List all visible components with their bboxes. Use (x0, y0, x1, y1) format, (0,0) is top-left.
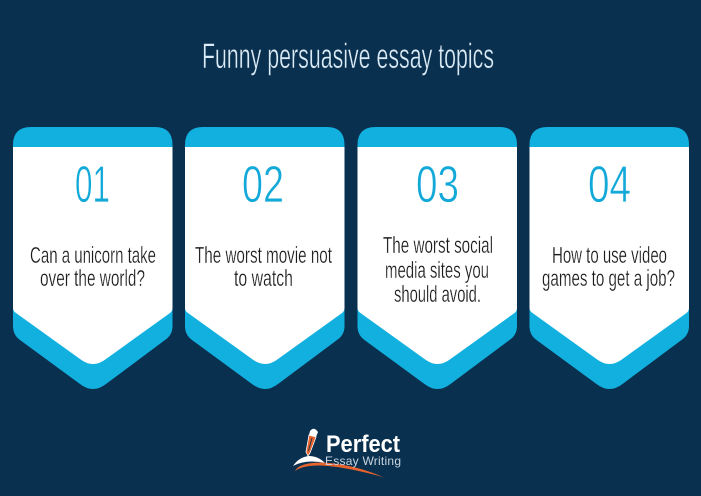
logo tagline: Essay Writing (325, 454, 401, 468)
icon: orange swoosh (295, 463, 383, 477)
text: card 03: media sites you (385, 257, 489, 283)
logo (293, 429, 401, 477)
text: card 04 (542, 242, 675, 291)
number 04: 04 (588, 156, 631, 214)
text: card 03 (383, 232, 493, 307)
text: card 02: to watch (234, 265, 293, 291)
text: card 01: over the world? (40, 265, 145, 291)
panel: card 04 (530, 127, 689, 389)
number 03: 03 (416, 156, 459, 214)
number 01: 01 (75, 156, 110, 214)
text: card 03: The worst social (383, 232, 493, 258)
text: card 03: should avoid. (394, 281, 481, 307)
text: card 02: The worst movie not (195, 242, 332, 268)
panel: card 02 (185, 127, 344, 389)
title: Funny persuasive essay topics (202, 37, 494, 76)
icon: open book swoosh (293, 456, 325, 466)
text: card 01 (30, 242, 156, 291)
icon: pencil (306, 429, 318, 456)
number 02: 02 (242, 156, 284, 214)
panel: card 01 (13, 127, 172, 389)
text: card 01: Can a unicorn take (30, 242, 156, 268)
text: card 02 (195, 242, 332, 291)
logo wordmark: Perfect (326, 431, 400, 458)
panel: card 03 (358, 127, 517, 389)
